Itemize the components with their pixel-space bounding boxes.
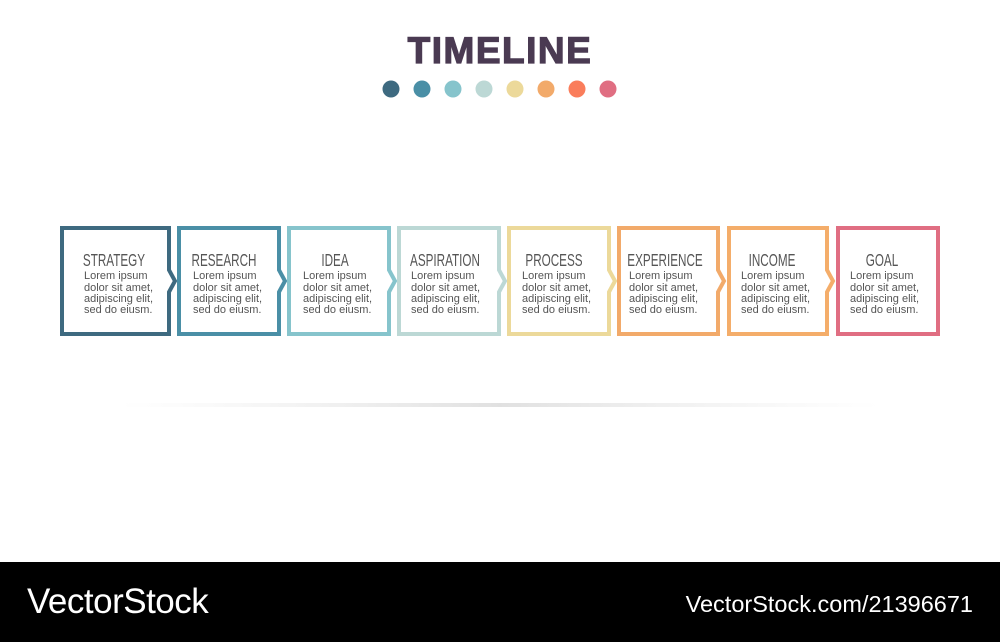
title: TIMELINE (408, 30, 592, 71)
step: aspiration: dolor sit amet, (411, 282, 480, 294)
step: aspiration: ASPIRATION (410, 251, 480, 271)
step: strategy: STRATEGY (83, 251, 145, 271)
step: goal: Lorem ipsum (850, 270, 914, 282)
step: experience: EXPERIENCE (627, 251, 703, 271)
step: income: sed do eiusm. (741, 304, 809, 316)
step: research: Lorem ipsum (193, 270, 257, 282)
step: aspiration: sed do eiusm. (411, 304, 479, 316)
step: strategy: adipiscing elit, (84, 293, 153, 305)
step: experience: Lorem ipsum (629, 270, 693, 282)
step: income: Lorem ipsum (741, 270, 805, 282)
step: income (729, 228, 833, 334)
step: strategy: sed do eiusm. (84, 304, 152, 316)
step: process: dolor sit amet, (522, 282, 591, 294)
step: process: adipiscing elit, (522, 293, 591, 305)
step: process: Lorem ipsum (522, 270, 586, 282)
step: goal: GOAL (866, 251, 898, 271)
step: strategy (62, 228, 175, 334)
step: aspiration: Lorem ipsum (411, 270, 475, 282)
step: research: dolor sit amet, (193, 282, 262, 294)
step: idea: IDEA (321, 251, 349, 271)
step: process: sed do eiusm. (522, 304, 590, 316)
step: research: RESEARCH (192, 251, 256, 271)
step: strategy: dolor sit amet, (84, 282, 153, 294)
footer bar (0, 562, 1000, 642)
step: experience: sed do eiusm. (629, 304, 697, 316)
step: income: adipiscing elit, (741, 293, 810, 305)
step: idea: dolor sit amet, (303, 282, 372, 294)
step: goal: sed do eiusm. (850, 304, 918, 316)
step: income: INCOME (749, 251, 795, 271)
step: idea: Lorem ipsum (303, 270, 367, 282)
step: experience: adipiscing elit, (629, 293, 698, 305)
step: income: dolor sit amet, (741, 282, 810, 294)
step: process: PROCESS (525, 251, 583, 271)
step: research: sed do eiusm. (193, 304, 261, 316)
step: idea (289, 228, 395, 334)
timeline steps (62, 228, 938, 334)
step: experience (619, 228, 724, 334)
shadow (120, 403, 880, 407)
step: goal: adipiscing elit, (850, 293, 919, 305)
step: idea: adipiscing elit, (303, 293, 372, 305)
footer bar: VectorStock (27, 582, 209, 621)
step: aspiration: adipiscing elit, (411, 293, 480, 305)
step: strategy: Lorem ipsum (84, 270, 148, 282)
step: idea: sed do eiusm. (303, 304, 371, 316)
step: goal (838, 228, 938, 334)
step: research (179, 228, 285, 334)
step: research: adipiscing elit, (193, 293, 262, 305)
step: aspiration (399, 228, 505, 334)
footer bar: VectorStock.com/21396671 (686, 591, 973, 617)
step: goal: dolor sit amet, (850, 282, 919, 294)
step: process (509, 228, 615, 334)
color dots (382, 80, 616, 98)
step: experience: dolor sit amet, (629, 282, 698, 294)
